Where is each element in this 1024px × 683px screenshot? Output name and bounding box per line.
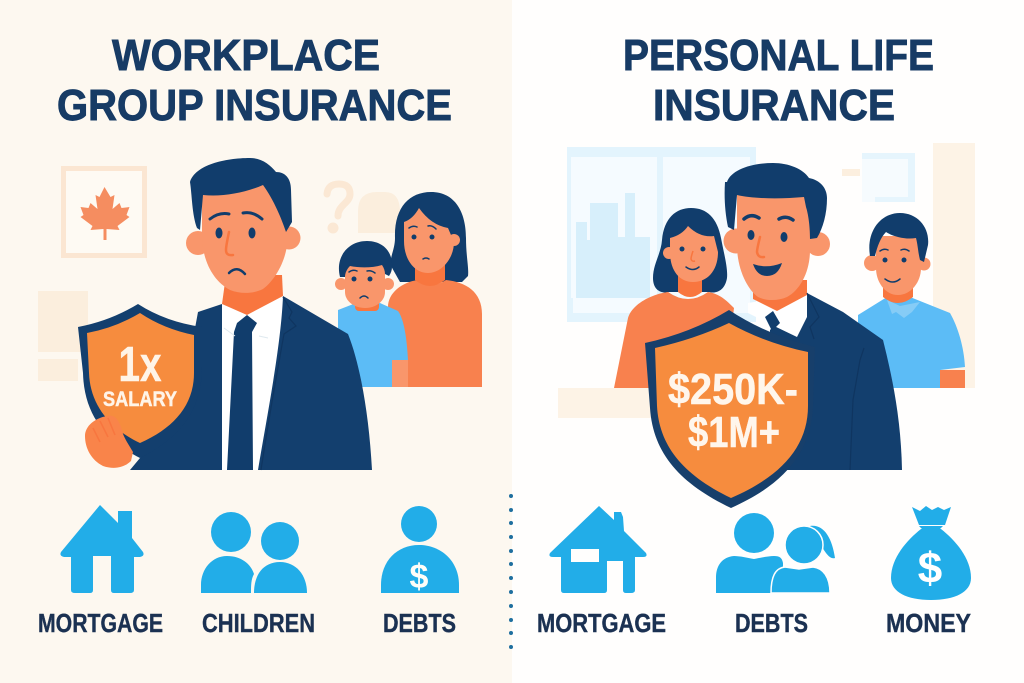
- icon: house with window: [549, 506, 647, 593]
- panel: workplace group insurance: [0, 0, 512, 683]
- shield label: $250K-: [668, 365, 798, 414]
- smiling woman: [614, 208, 734, 388]
- label: children: CHILDREN: [202, 608, 315, 638]
- title: workplace group insurance: [57, 31, 452, 130]
- panel: personal life insurance: [537, 31, 975, 638]
- shield label: $1M+: [688, 408, 780, 457]
- shield: 1x salary: [78, 304, 202, 458]
- shield label: [103, 338, 177, 411]
- title: workplace group insurance: WORKPLACE: [112, 31, 380, 80]
- icon: house: [60, 505, 144, 593]
- shield: $250K-$1M+: [645, 310, 815, 508]
- shield label: 1x: [118, 338, 162, 392]
- icon: person with dollar: [381, 506, 459, 596]
- title: personal life insurance: INSURANCE: [653, 81, 895, 130]
- title: personal life insurance: [623, 31, 934, 130]
- question mark: [327, 184, 350, 234]
- hand holding shield: [85, 416, 133, 468]
- label: mortgage: MORTGAGE: [537, 608, 666, 638]
- icon: two children: [201, 512, 307, 593]
- icon: adult and child: [716, 513, 835, 593]
- shield label: SALARY: [103, 388, 177, 411]
- label: mortgage: MORTGAGE: [38, 608, 163, 638]
- window with skyline: [567, 147, 756, 322]
- framed maple leaf picture: [64, 168, 144, 256]
- icon: money bag: [891, 506, 971, 600]
- smiling man in suit: [724, 163, 902, 470]
- shield label: [668, 365, 798, 457]
- smiling boy: [858, 213, 965, 388]
- dotted divider: [509, 494, 513, 649]
- icon: person with dollar: $: [410, 558, 429, 596]
- peach column and desk: [558, 143, 975, 418]
- background shapes: [38, 192, 400, 381]
- title: workplace group insurance: GROUP INSURANCE: [57, 81, 452, 130]
- label: debts: DEBTS: [735, 608, 808, 638]
- wall picture: [842, 153, 915, 202]
- icon: money bag: $: [918, 544, 942, 593]
- title: personal life insurance: PERSONAL LIFE: [623, 31, 934, 80]
- label: debts: DEBTS: [383, 608, 456, 638]
- worried boy: [335, 241, 408, 387]
- worried man in suit: [130, 158, 372, 470]
- worried woman: [388, 192, 482, 387]
- label: money: MONEY: [886, 608, 971, 638]
